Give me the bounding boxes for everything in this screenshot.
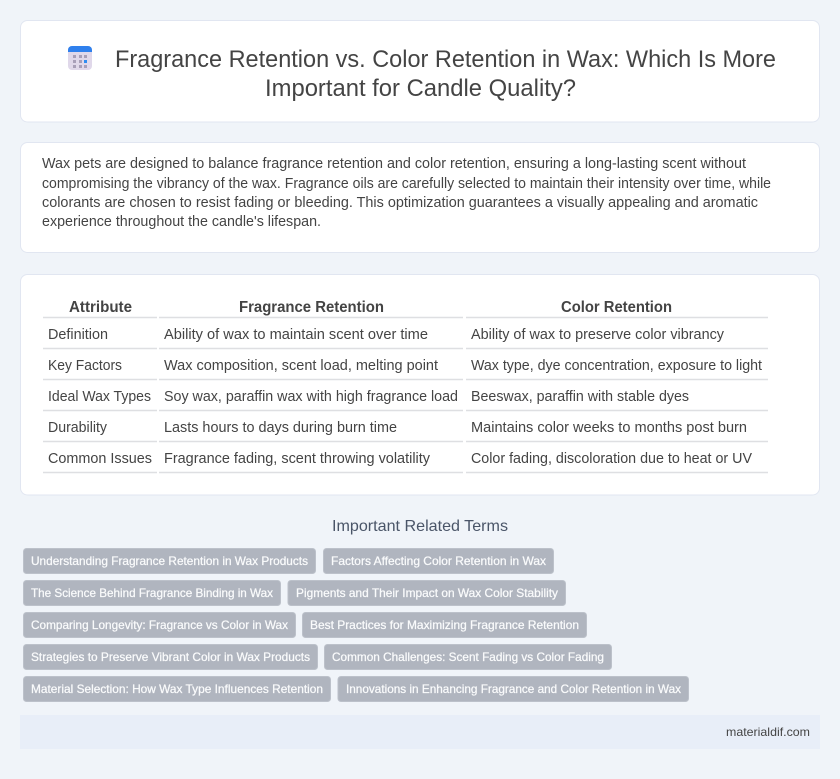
- table row: durability: Lasts hours to days during burn time: [164, 420, 397, 436]
- title: [115, 46, 776, 102]
- tag: Material Selection: How Wax Type Influences Retention: [31, 682, 323, 696]
- tag: [24, 676, 330, 702]
- tag: [24, 612, 296, 638]
- text block: introduction paragraph: compromising the vibrancy of the wax. Fragrance oils are carefully selected to maintain their intensity over time, while: [42, 176, 771, 192]
- tag: Best Practices for Maximizing Fragrance Retention: [310, 618, 579, 632]
- table row: key factors: Key Factors: [48, 358, 122, 374]
- tag: The Science Behind Fragrance Binding in Wax: [31, 586, 273, 600]
- table row: durability: Maintains color weeks to months post burn: [471, 420, 747, 436]
- tag: [24, 644, 318, 670]
- table row: ideal wax types: [48, 389, 689, 405]
- table row: ideal wax types: Beeswax, paraffin with stable dyes: [471, 389, 689, 405]
- tag: [288, 580, 566, 606]
- table row: common issues: Common Issues: [48, 451, 152, 467]
- table row: definition: [48, 327, 725, 343]
- tag list: related terms: [24, 548, 688, 702]
- table row: key factors: Wax type, dye concentration, exposure to light: [471, 358, 762, 374]
- tag: Pigments and Their Impact on Wax Color Stability: [296, 586, 558, 600]
- tag: [302, 612, 586, 638]
- table header row: Color Retention: [561, 299, 672, 316]
- tag: [324, 548, 554, 574]
- table row: durability: Durability: [48, 420, 108, 436]
- text block: introduction paragraph: Wax pets are designed to balance fragrance retention and color retention, ensuring a long-lasting scent without: [42, 156, 746, 172]
- table row: key factors: [48, 358, 762, 374]
- table row: common issues: Fragrance fading, scent throwing volatility: [164, 451, 431, 467]
- table header row: Attribute: [69, 299, 132, 316]
- tag: [338, 676, 688, 702]
- table row: definition: Ability of wax to maintain scent over time: [164, 327, 428, 343]
- tag: Common Challenges: Scent Fading vs Color Fading: [332, 650, 604, 664]
- table row: common issues: [48, 451, 752, 467]
- tag: Factors Affecting Color Retention in Wax: [331, 554, 546, 568]
- table row: ideal wax types: Soy wax, paraffin wax with high fragrance load: [164, 389, 458, 405]
- text block: introduction paragraph: experience throughout the candle's lifespan.: [42, 214, 321, 230]
- title: Important for Candle Quality?: [265, 75, 576, 102]
- tag: Strategies to Preserve Vibrant Color in Wax Products: [31, 650, 310, 664]
- panel: comparison table: [20, 274, 820, 495]
- tag: Innovations in Enhancing Fragrance and Color Retention in Wax: [346, 682, 681, 696]
- title: Fragrance Retention vs. Color Retention in Wax: Which Is More: [115, 46, 776, 73]
- table row: key factors: Wax composition, scent load, melting point: [164, 358, 438, 374]
- tag: Comparing Longevity: Fragrance vs Color in Wax: [31, 618, 288, 632]
- tag: Understanding Fragrance Retention in Wax Products: [31, 554, 308, 568]
- table row: durability: [48, 420, 747, 436]
- panel: title header: [20, 20, 820, 122]
- icon: calendar: [68, 46, 92, 70]
- table row: ideal wax types: Ideal Wax Types: [48, 389, 151, 405]
- tag: [324, 644, 612, 670]
- footer bar: [20, 715, 820, 749]
- table header row: Fragrance Retention: [239, 299, 384, 316]
- text block: introduction paragraph: [42, 156, 771, 230]
- panel: introduction: [20, 142, 820, 252]
- tag: [24, 548, 316, 574]
- heading: important related terms: Important Related Terms: [332, 518, 508, 535]
- table row: definition: Definition: [48, 327, 108, 343]
- footer text: materialdif.com: [726, 725, 810, 739]
- table header row: [69, 299, 672, 316]
- tag: [24, 580, 280, 606]
- table row: common issues: Color fading, discoloration due to heat or UV: [471, 451, 752, 467]
- table row: definition: Ability of wax to preserve color vibrancy: [471, 327, 725, 343]
- text block: introduction paragraph: colorants are chosen to resist fading or bleeding. This optimization guarantees a visually appealing and aromatic: [42, 195, 758, 211]
